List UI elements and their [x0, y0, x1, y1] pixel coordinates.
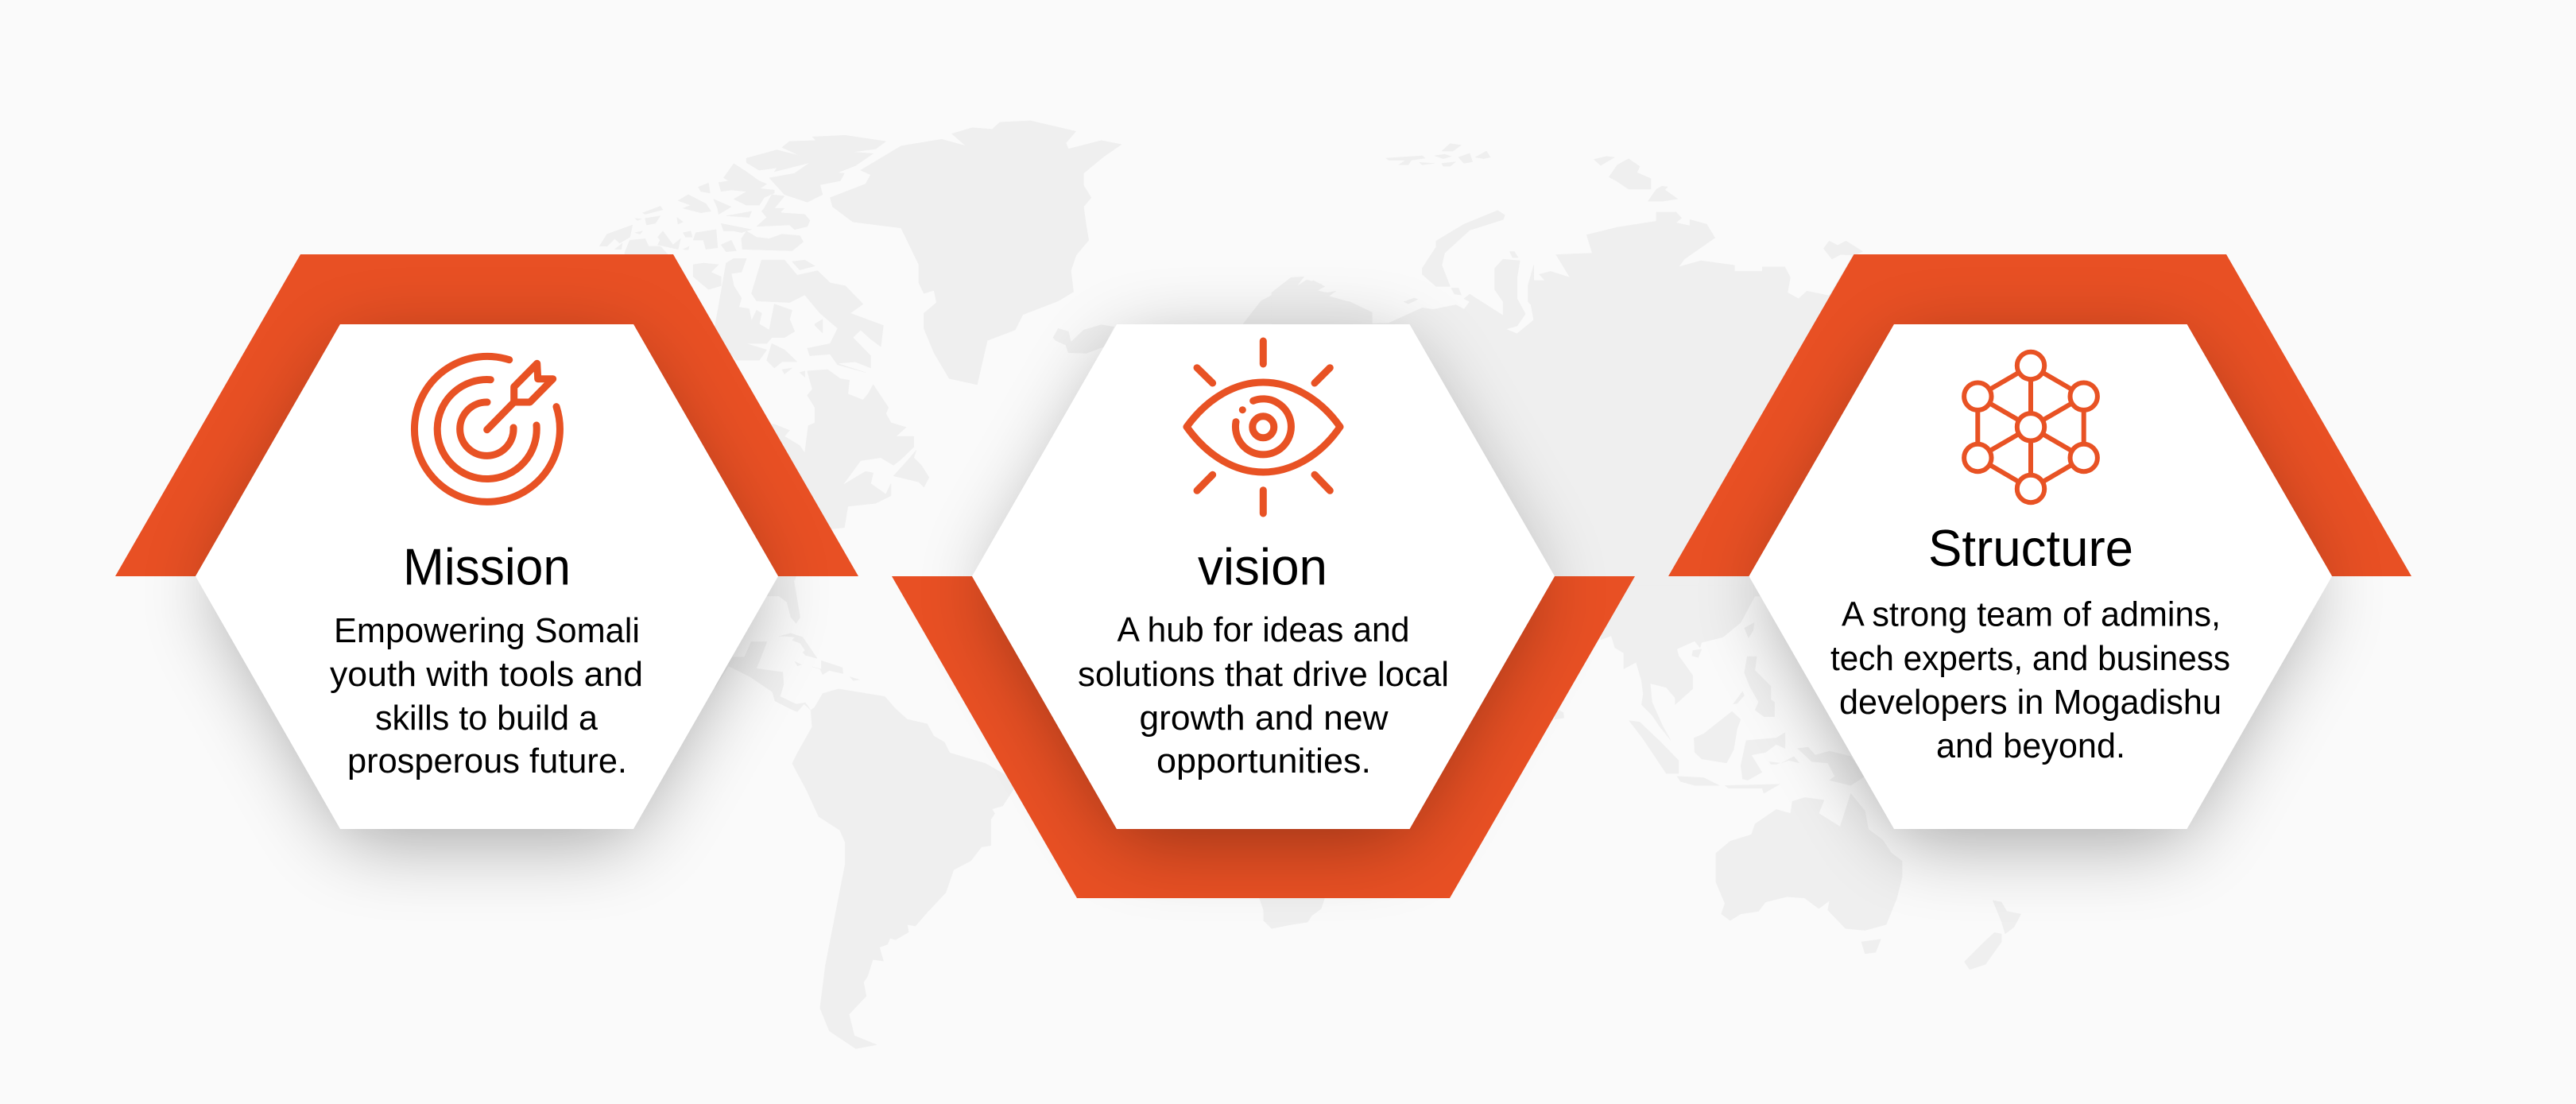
mission description: skills to build a [375, 699, 598, 738]
structure description [1830, 596, 2230, 765]
vision description: opportunities. [1156, 742, 1371, 781]
mission description: youth with tools and [330, 656, 643, 694]
mission heading: Mission [403, 537, 571, 596]
structure description: developers in Mogadishu [1839, 684, 2222, 722]
vision white hexagon [972, 324, 1555, 829]
vision heading: vision [1198, 537, 1327, 596]
icon: target with arrow [414, 356, 560, 502]
structure description: and beyond. [1936, 727, 2125, 765]
mission white hexagon [196, 324, 778, 829]
mission orange frame [115, 254, 858, 576]
vision description [1078, 611, 1449, 781]
structure orange frame [1668, 254, 2411, 576]
structure white hexagon [1749, 324, 2332, 829]
world map background [599, 121, 2052, 1048]
vision orange frame [892, 576, 1635, 898]
icon: network of nodes [1964, 352, 2098, 502]
vision description: A hub for ideas and [1118, 611, 1410, 649]
structure description: tech experts, and business [1830, 640, 2230, 678]
structure heading: Structure [1928, 519, 2133, 577]
vision description: growth and new [1140, 699, 1389, 738]
mission hexagon shadow [215, 350, 759, 839]
mission description: Empowering Somali [334, 612, 640, 650]
panel: mission [115, 254, 858, 839]
panel: vision [892, 324, 1635, 898]
structure description: A strong team of admins, [1842, 596, 2221, 634]
structure hexagon shadow [1768, 350, 2313, 839]
mission description: prosperous future. [347, 742, 627, 781]
vision description: solutions that drive local [1078, 656, 1449, 694]
icon: eye with rays [1187, 341, 1340, 513]
vision hexagon shadow [991, 350, 1536, 839]
panel: structure [1668, 254, 2411, 839]
mission description [330, 612, 643, 781]
